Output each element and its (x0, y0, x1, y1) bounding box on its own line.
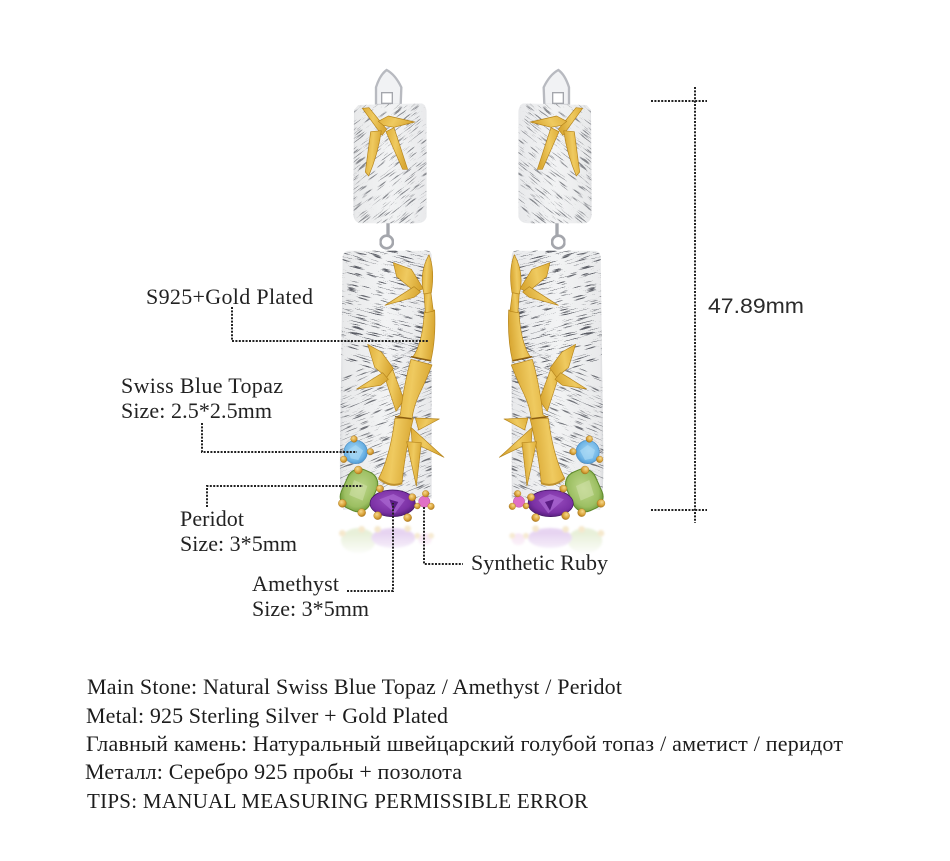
gem: amethyst (370, 485, 416, 522)
label: Amethyst: Size: 3*5mm (252, 596, 369, 621)
connector ring (380, 223, 393, 248)
label: Swiss Blue Topaz (121, 373, 283, 423)
right earring: lower plate (mirrored) (443, 192, 671, 557)
gem: reflections (339, 525, 434, 553)
text block: product specifications: Main Stone: Natural Swiss Blue Topaz / Amethyst / Peridot (87, 674, 622, 699)
text block: product specifications: Главный камень: Натуральный швейцарский голубой топаз / аметист / перидот (86, 731, 843, 756)
text block: product specifications: Metal: 925 Sterling Silver + Gold Plated (86, 703, 448, 728)
text block: product specifications (85, 674, 843, 813)
text block: product specifications: TIPS: MANUAL MEASURING PERMISSIBLE ERROR (87, 789, 588, 813)
gem: peridot (336, 465, 382, 517)
leader: Peridot (207, 486, 363, 507)
leader: S925 + Gold Plated (232, 307, 428, 341)
label: Peridot: Peridot (180, 506, 244, 531)
label: Synthetic Ruby: Synthetic Ruby (471, 550, 608, 575)
leader: Synthetic Ruby (424, 507, 463, 564)
hook window (382, 93, 392, 103)
dimension line: height (651, 87, 707, 523)
label: Amethyst (252, 571, 369, 621)
label: Amethyst: Amethyst (252, 571, 339, 596)
gem: swiss blue topaz (340, 436, 374, 464)
label: S925+Gold Plated: S925+Gold Plated (146, 284, 313, 309)
gold bamboo leaves (362, 108, 415, 176)
reflection fade (330, 533, 443, 557)
right earring: upper plate (mirrored) (431, 39, 670, 277)
leader: Amethyst (347, 503, 393, 591)
left earring: upper plate with hook (353, 68, 592, 250)
bamboo stem and leaves (357, 255, 444, 486)
gem: synthetic ruby (414, 490, 434, 510)
text block: product specifications: Металл: Серебро 925 пробы + позолота (85, 759, 462, 784)
dimension label: 47.89mm (708, 295, 804, 318)
label: Swiss Blue Topaz: Swiss Blue Topaz (121, 373, 283, 398)
leader: Swiss Blue Topaz (202, 423, 357, 452)
textured silver plate (353, 104, 592, 224)
textured silver plate (340, 250, 604, 510)
hook (376, 70, 401, 105)
label: Peridot: Size: 3*5mm (180, 531, 297, 556)
label: Peridot (180, 506, 297, 556)
left earring: lower bamboo plate with gemstones (272, 192, 500, 557)
label: Swiss Blue Topaz: Size: 2.5*2.5mm (121, 398, 272, 423)
